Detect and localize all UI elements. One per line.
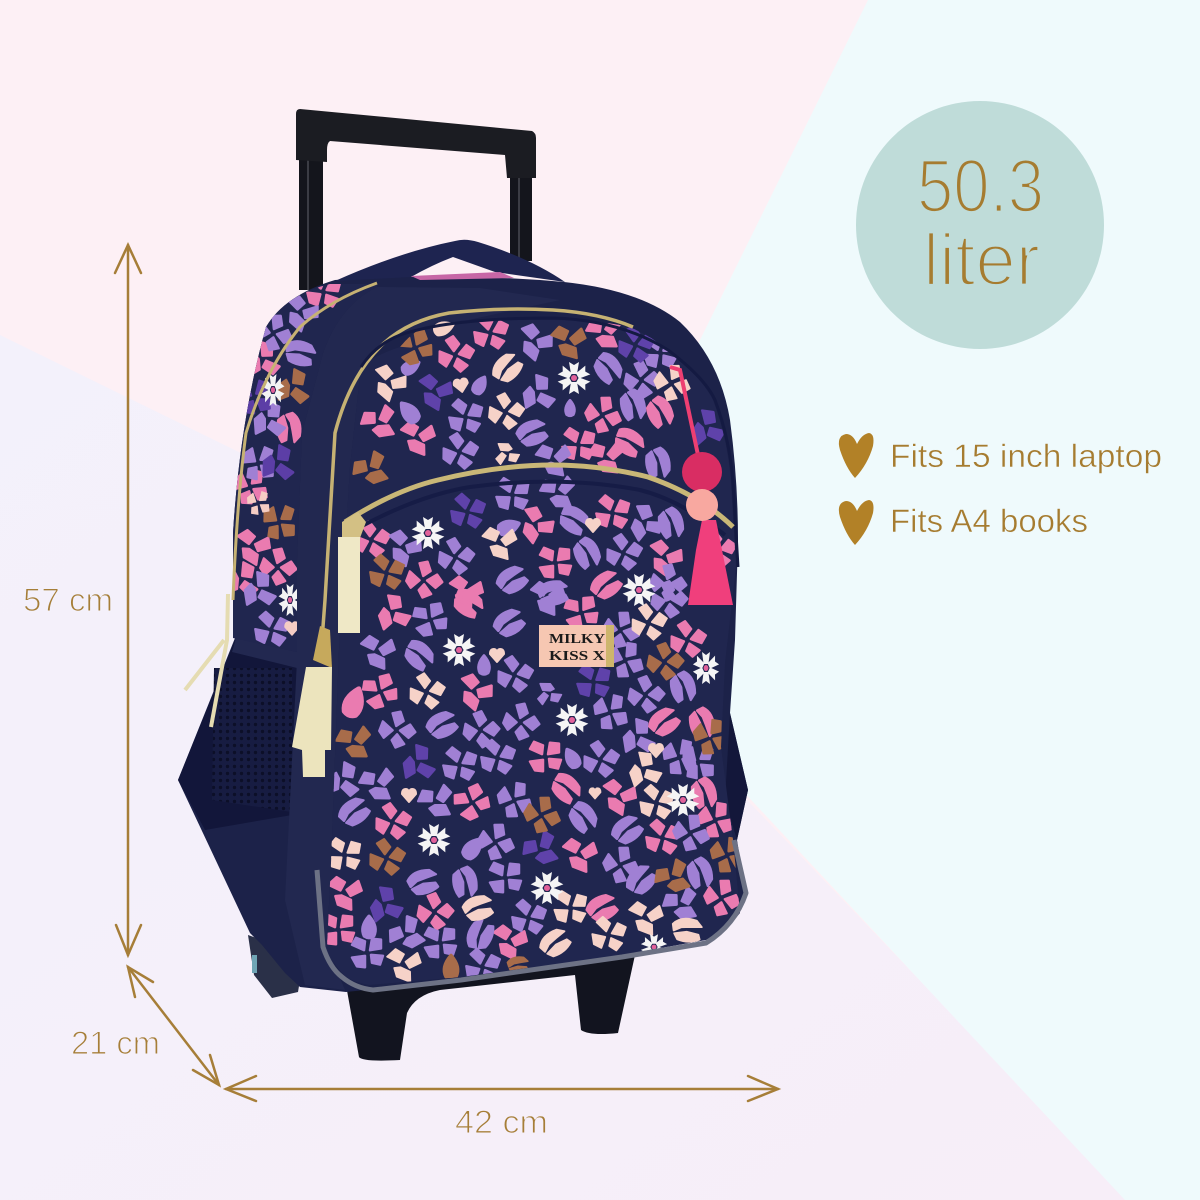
- volume badge: [856, 101, 1104, 349]
- tassel cord: [670, 367, 698, 455]
- background: lavender lower area: [0, 335, 1130, 1200]
- width arrow: [226, 1076, 778, 1101]
- brown flowers: [335, 326, 747, 978]
- right side pocket: [725, 713, 748, 840]
- label: depth: 21 cm: [71, 1025, 160, 1061]
- side printed strip: [233, 284, 341, 647]
- volume badge: liter: [923, 220, 1040, 301]
- tassel charm: [670, 367, 733, 605]
- label: width: 42 cm: [455, 1104, 548, 1140]
- tassel fringe: [688, 520, 733, 605]
- mesh texture: [212, 668, 292, 812]
- trolley handle: [296, 109, 536, 178]
- feature: books: Fits A4 books: [890, 503, 1088, 539]
- icon: heart 1: [839, 433, 874, 478]
- brand patch: KISS X: [549, 649, 605, 664]
- height arrow: [115, 245, 141, 955]
- blush flowers: [327, 319, 703, 983]
- feature: laptop: Fits 15 inch laptop: [890, 438, 1162, 474]
- peach pom-pom: [686, 489, 718, 521]
- telescopic poles: [299, 158, 532, 290]
- pink flowers: [323, 313, 742, 961]
- volume badge: 50.3: [917, 144, 1044, 228]
- brand patch: MILKY: [549, 632, 605, 647]
- backpack illustration: [178, 109, 748, 1061]
- trolley wheel: [248, 935, 300, 998]
- side pocket band: [232, 638, 297, 668]
- dark purple flowers: [362, 324, 727, 927]
- brand patch: [539, 625, 614, 667]
- icon: heart 2: [839, 500, 874, 545]
- side mesh pocket: [178, 640, 297, 830]
- wheel accent: [252, 955, 257, 973]
- main zipper pull: [292, 626, 332, 777]
- front printed panel: [320, 310, 747, 990]
- lilac flowers: [324, 321, 715, 986]
- pink pom-pom: [682, 452, 722, 492]
- backpack body: [178, 276, 748, 992]
- bottom bumper: [317, 840, 746, 990]
- trolley legs: [346, 955, 635, 1061]
- top print strip under handle: [411, 272, 514, 280]
- label: height: 57 cm: [23, 582, 113, 618]
- side gusset: [285, 287, 560, 990]
- main arch zipper: [322, 309, 738, 640]
- pocket zipper pull: [338, 512, 366, 633]
- white daisies: [412, 362, 719, 960]
- depth arrow: [128, 967, 219, 1085]
- front pocket zipper: [345, 465, 733, 535]
- background: pale blue right area: [569, 0, 1200, 1200]
- side zipper: [233, 283, 377, 600]
- side zipper pulls: [185, 594, 228, 727]
- carry handle: [335, 240, 565, 282]
